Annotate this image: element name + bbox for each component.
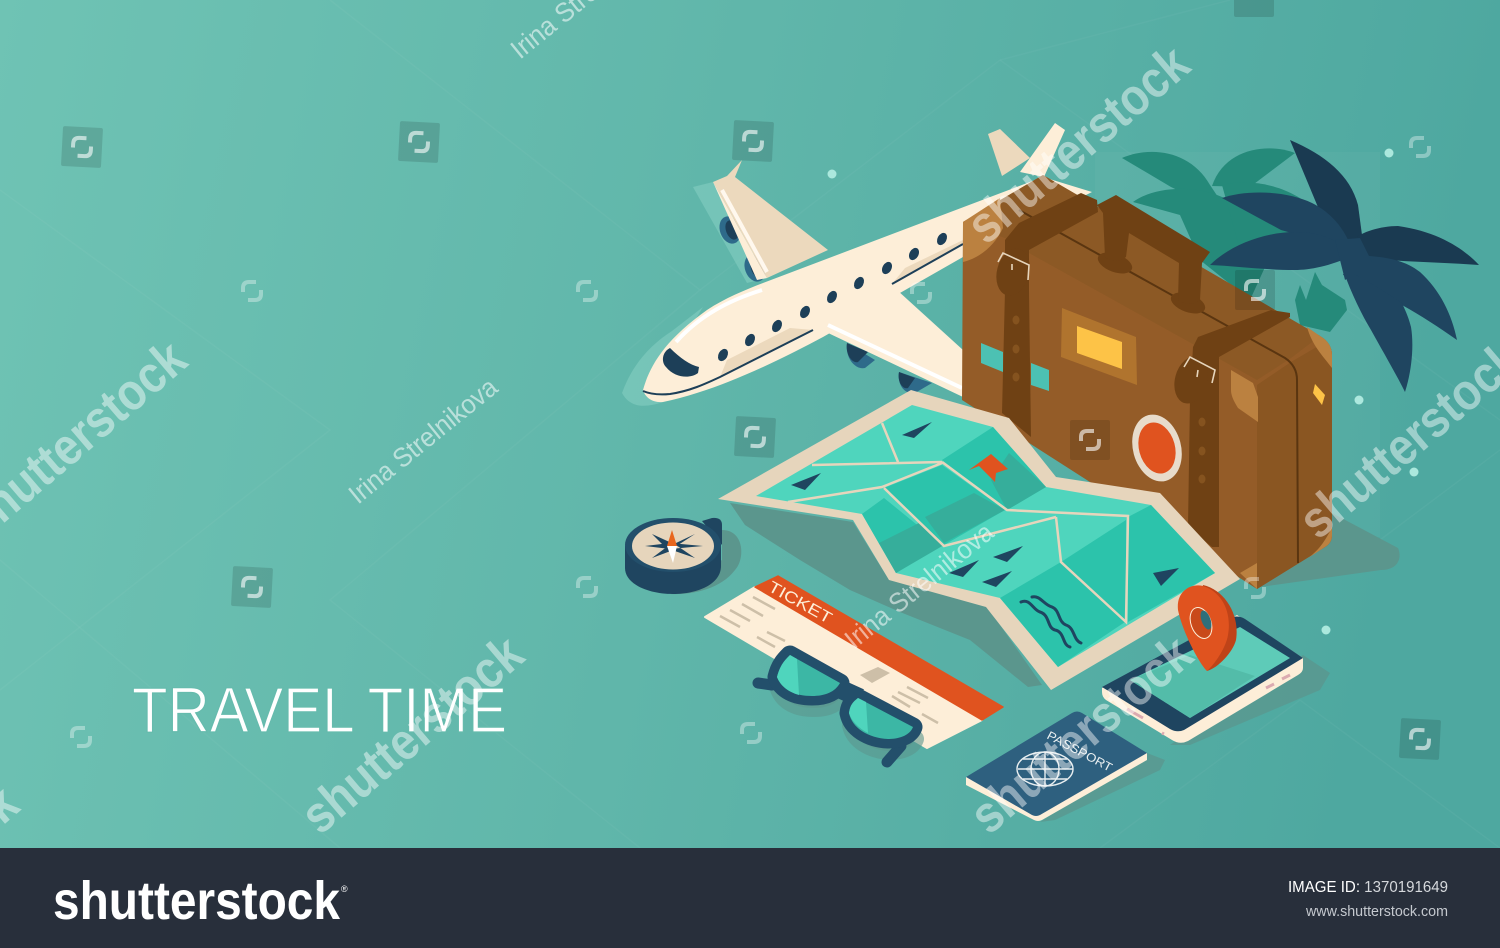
teal stickers xyxy=(981,343,1049,391)
phone body xyxy=(1102,615,1303,743)
phone shadow xyxy=(1170,655,1330,745)
pin hole xyxy=(1186,605,1216,641)
phone buttons xyxy=(1127,675,1290,734)
back palm xyxy=(1122,148,1347,332)
compass xyxy=(625,518,741,594)
watermark: small marks xyxy=(72,138,1429,746)
watermark: shutterstock wordmarks: shutterstock xyxy=(290,624,535,845)
address label xyxy=(1061,308,1137,385)
fuselage xyxy=(643,177,1092,402)
title: TRAVEL TIME xyxy=(132,674,507,746)
map waves xyxy=(1021,597,1081,647)
footer bar xyxy=(0,848,1500,948)
ticket band xyxy=(755,576,1003,720)
watermark: author credits: Irina Strelnikova xyxy=(839,516,1000,655)
map paper xyxy=(718,390,1240,690)
ticket paper xyxy=(705,587,982,748)
yellow diamond tag xyxy=(1313,384,1325,405)
decorative dots xyxy=(828,148,1418,634)
white tail stabiliser xyxy=(1020,123,1065,177)
near engines xyxy=(847,343,932,393)
watermark: author credits: Irina Strelnikova xyxy=(343,371,504,510)
fuselage stripe xyxy=(643,244,963,394)
pin side xyxy=(1195,585,1237,671)
tail fin xyxy=(988,129,1030,176)
belly shading xyxy=(720,240,963,377)
left lens xyxy=(777,655,840,696)
passenger windows xyxy=(716,231,949,363)
passport xyxy=(966,712,1165,822)
sunglasses xyxy=(758,655,915,762)
fuselage highlight xyxy=(676,290,762,342)
ticket stub mark xyxy=(860,667,890,683)
phone screen xyxy=(1130,627,1290,718)
passport cover xyxy=(966,712,1147,816)
airplane shadow xyxy=(622,307,703,406)
compass star xyxy=(645,530,703,563)
handle xyxy=(1095,195,1210,318)
compass shadow xyxy=(670,530,741,594)
footer logo: shutterstock xyxy=(53,871,341,931)
front palm xyxy=(1210,140,1479,392)
leather corners xyxy=(963,198,1332,589)
ticket heading: TICKET xyxy=(765,579,835,628)
footer image id: IMAGE ID: 1370191649 xyxy=(1288,879,1448,896)
folded map xyxy=(718,390,1240,690)
right lens xyxy=(849,698,913,739)
passport heading: PASSPORT xyxy=(1045,728,1115,775)
map shadow xyxy=(730,503,1042,687)
footer registered mark: ® xyxy=(341,884,348,894)
compass body xyxy=(625,544,721,594)
map fold panels xyxy=(862,427,1215,667)
panel glow behind palm xyxy=(1095,152,1380,537)
passport shadow xyxy=(1040,753,1165,822)
compass face xyxy=(632,522,714,570)
ticket text lines xyxy=(720,597,938,723)
suitcase side face xyxy=(1257,345,1332,589)
sunglasses temples xyxy=(758,683,901,762)
map markers xyxy=(791,422,1179,587)
passport globe xyxy=(1017,752,1073,786)
sunglasses shadow xyxy=(779,667,915,751)
compass loop xyxy=(702,518,722,545)
phone screen frame xyxy=(1102,616,1303,731)
far wing xyxy=(713,160,828,278)
phone xyxy=(1102,615,1330,745)
pin front xyxy=(1178,585,1229,671)
ticket xyxy=(705,576,1003,748)
map fold lines xyxy=(788,423,1128,622)
round sticker xyxy=(1125,409,1189,487)
near wing xyxy=(807,290,963,397)
cockpit window xyxy=(663,348,699,377)
far wing shadow xyxy=(693,182,767,283)
passport edge xyxy=(966,753,1147,821)
map flag xyxy=(969,454,1008,482)
far engines xyxy=(716,213,769,285)
suitcase body xyxy=(962,175,1332,589)
map land xyxy=(756,405,1215,667)
strap left xyxy=(991,193,1098,437)
airplane xyxy=(622,123,1092,406)
strap right xyxy=(1169,310,1290,547)
suitcase top face xyxy=(963,175,1320,380)
location pin xyxy=(1178,585,1237,671)
footer url: www.shutterstock.com xyxy=(1305,903,1448,920)
suitcase xyxy=(962,175,1332,589)
watermark: author credits xyxy=(343,0,1000,655)
lid seam xyxy=(1019,210,1298,563)
watermark: square badges xyxy=(61,0,1441,760)
sunglasses frame xyxy=(777,655,913,739)
suitcase shadow xyxy=(1260,513,1400,587)
watermark: shutterstock wordmarks: shutterstock xyxy=(956,34,1201,255)
watermark: shutterstock wordmarks: shutterstock xyxy=(959,624,1204,845)
